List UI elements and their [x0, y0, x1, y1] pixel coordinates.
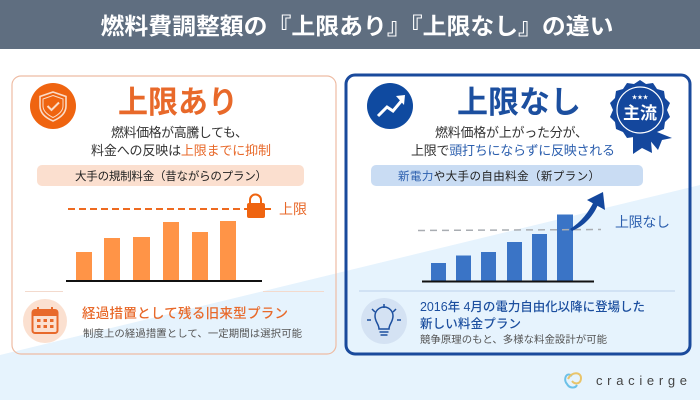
chart: capped bars: [66, 194, 307, 281]
text: description: 上限で頭打ちにならずに反映される: [411, 143, 615, 158]
icon: lightbulb: [361, 298, 407, 344]
label: 上限: 上限: [279, 201, 307, 217]
plan label pill: [37, 165, 304, 186]
title banner: 燃料費調整額の『上限あり』『上限なし』の違い: [100, 13, 614, 39]
plan label pill: [371, 165, 643, 186]
heading: 上限あり: 上限あり: [118, 85, 238, 120]
panel: 上限なし: [346, 75, 690, 354]
title banner: [0, 0, 700, 49]
badge: 主流: 主流: [623, 104, 657, 123]
text: description: [411, 125, 615, 158]
icon: calendar: [23, 299, 67, 343]
text: description: [91, 125, 271, 158]
text: description: 燃料価格が高騰しても、: [111, 125, 248, 140]
text: legacy plan note: 制度上の経過措置として、一定期間は選択可能: [83, 327, 303, 340]
plan label pill: 新電力や大手の自由料金（新プラン）: [398, 169, 600, 183]
text: legacy plan note: [82, 305, 303, 340]
badge: 主流: [610, 80, 672, 154]
heading: 上限なし: 上限なし: [457, 85, 581, 120]
text: description: 料金への反映は上限までに抑制: [91, 143, 271, 158]
logo: cracierge: cracierge: [596, 373, 687, 388]
arrow: rising past the cap: [570, 192, 605, 231]
text: new plan note: 2016年 4月の電力自由化以降に登場した: [420, 299, 645, 314]
text: legacy plan note: 経過措置として残る旧来型プラン: [82, 305, 288, 321]
label: 上限なし: 上限なし: [615, 214, 670, 230]
icon: padlock: [245, 194, 271, 218]
text: new plan note: 競争原理のもと、多様な料金設計が可能: [420, 333, 608, 346]
icon: shield with check: [30, 83, 76, 129]
text: new plan note: [420, 299, 645, 346]
badge: 主流: ★★★: [632, 95, 649, 101]
icon: rising trend arrow: [367, 83, 413, 129]
text: new plan note: 新しい料金プラン: [420, 316, 521, 331]
plan label pill: 大手の規制料金（昔ながらのプラン）: [75, 169, 267, 183]
panel: 上限あり: [12, 76, 336, 354]
text: description: 燃料価格が上がった分が、: [435, 125, 588, 140]
chart: uncapped bars: [418, 192, 670, 282]
